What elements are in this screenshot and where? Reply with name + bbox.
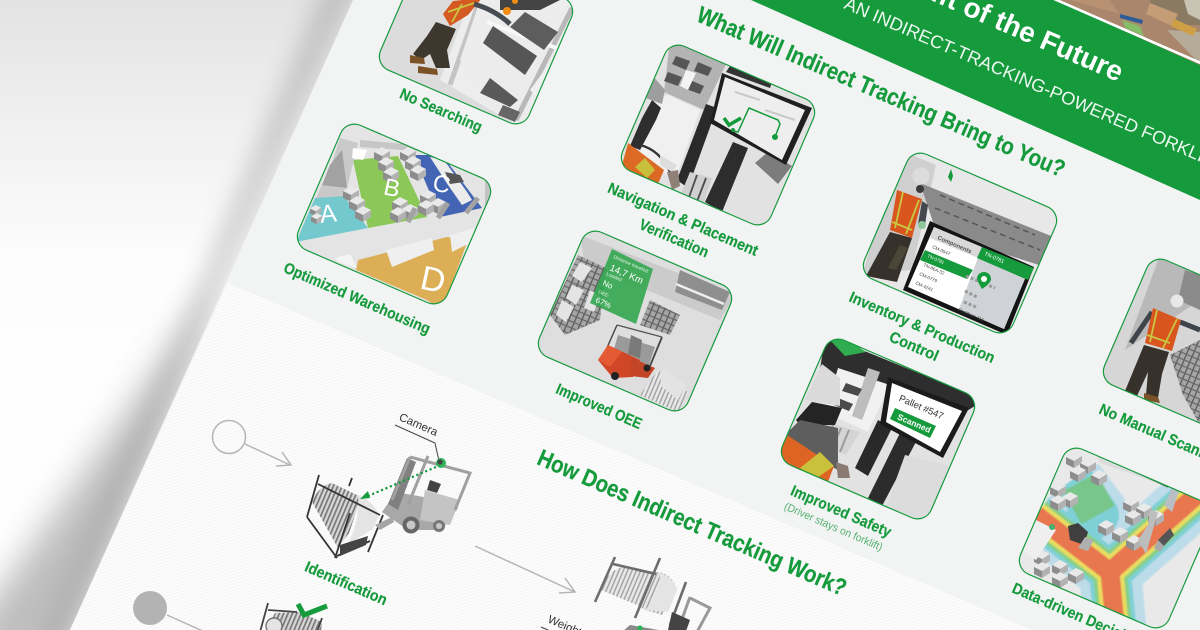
card: Improved Safety xyxy=(780,338,976,520)
tablet: CM-4241 xyxy=(915,280,934,293)
card: Optimized Warehousing: D xyxy=(417,259,449,301)
shelving on zone C xyxy=(430,157,472,205)
zone letters: A xyxy=(318,199,338,229)
tablet xyxy=(903,221,1034,335)
walls and racks xyxy=(316,138,358,198)
tablet: Position: D4 xyxy=(957,307,985,324)
label: Improved OEE: Improved OEE xyxy=(553,381,644,433)
card: Improved Safety: Pallet #547 xyxy=(897,393,945,422)
step marker and arrow: open circle xyxy=(212,420,291,466)
card: Improved Safety: Scanned xyxy=(896,412,932,435)
heading: What Will Indirect Tracking Bring to You?: What Will Indirect Tracking Bring to You? xyxy=(693,1,1069,182)
label: Improved Safety: (Driver stays on forklift) xyxy=(782,501,884,554)
header banner xyxy=(751,0,1200,200)
card: No Searching xyxy=(378,0,574,124)
overlay panel: Distance traveled: xyxy=(612,254,650,275)
card: Optimized Warehousing: C xyxy=(430,169,453,199)
arrow: between steps xyxy=(475,546,575,593)
banner green xyxy=(751,0,1200,200)
heatmap xyxy=(1036,480,1200,630)
label: Identification: Identification xyxy=(302,559,390,609)
lower section: striped paper xyxy=(70,283,1032,630)
overlay panel: 67% xyxy=(594,296,612,310)
card: Improved OEE xyxy=(538,230,732,412)
label: No Searching: No Searching xyxy=(397,86,485,136)
card: No Manual Scanning xyxy=(1102,258,1200,424)
floor zones xyxy=(353,156,427,228)
card: Navigation & Placement Verification xyxy=(620,44,816,226)
camera sight line xyxy=(360,458,446,499)
tablet: Components xyxy=(936,235,973,256)
illustration: verified load with green check xyxy=(260,603,327,630)
overlay panel: Loaded: xyxy=(605,271,624,284)
pillars xyxy=(408,208,415,222)
illustration: weighing forklift xyxy=(541,557,710,630)
forklift xyxy=(375,456,470,534)
label: Improved Safety: Improved Safety xyxy=(788,483,894,541)
tablet: CM-0779 xyxy=(919,271,938,284)
label: Inventory & Production Control: Control xyxy=(887,329,941,365)
step marker: filled circle xyxy=(133,591,205,630)
camera callout xyxy=(395,412,440,461)
card: Data-driven Decisions xyxy=(1010,440,1200,630)
white stacks xyxy=(386,238,434,267)
camera callout: Camera xyxy=(397,412,440,439)
tablet: TN-0781 xyxy=(927,253,945,265)
overlay panel: OEE: xyxy=(597,289,610,299)
overlay panel: 14,7 Km xyxy=(608,263,645,287)
heading: How Does Indirect Tracking Work?: How Does Indirect Tracking Work? xyxy=(534,444,851,601)
label: Optimized Warehousing: Optimized Warehousing xyxy=(281,260,433,338)
card: Inventory & Production Control xyxy=(862,152,1058,334)
card: Optimized Warehousing xyxy=(296,124,492,304)
tablet: TN-86A-32 xyxy=(923,262,946,276)
tablet: TN-0781 xyxy=(983,251,1005,265)
label: Inventory & Production Control: Inventory & Production xyxy=(846,289,997,367)
tablet: CM-0547 xyxy=(932,244,951,257)
overlay panel xyxy=(590,249,653,324)
load cage xyxy=(307,475,383,558)
label: Navigation & Placement Verification: Navigation & Placement xyxy=(605,180,761,260)
overlay panel: No xyxy=(601,279,615,291)
red forklift xyxy=(598,325,662,380)
illustration: identification forklift with camera xyxy=(307,412,470,558)
card: Optimized Warehousing: B xyxy=(381,174,403,203)
banner photo xyxy=(1050,0,1200,68)
label: Navigation & Placement Verification: Verification xyxy=(636,216,711,261)
icon: green check xyxy=(298,604,327,615)
